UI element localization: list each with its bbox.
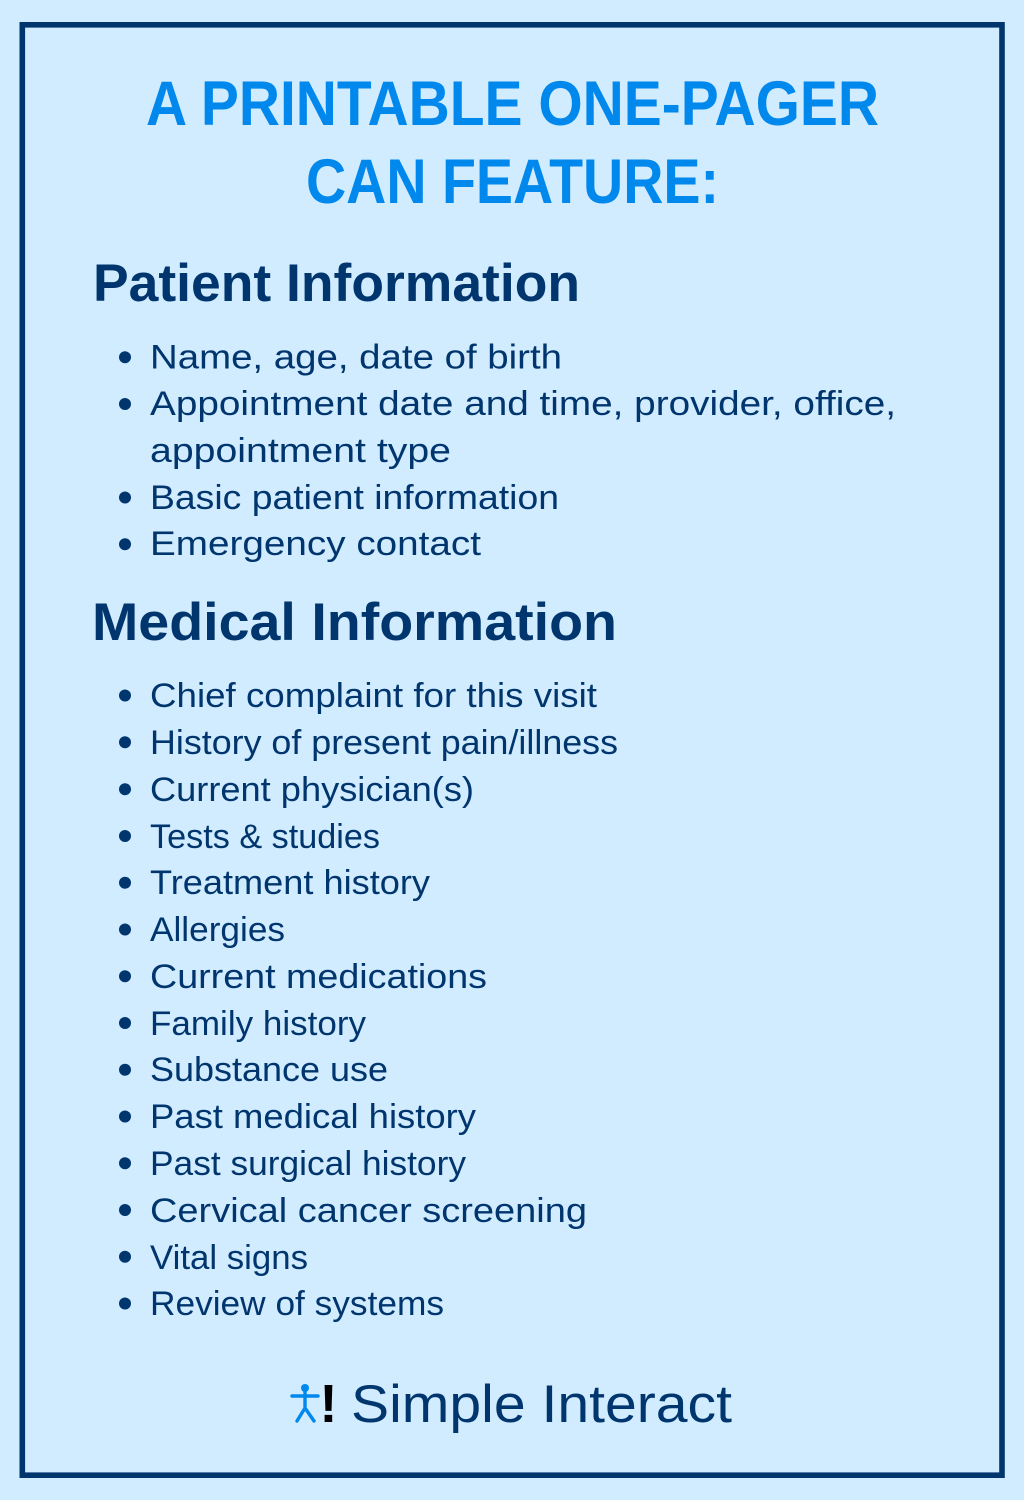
list: patient information items: Emergency contact xyxy=(150,525,481,563)
icon: stick figure xyxy=(292,1384,318,1421)
list: patient information items: Basic patient information xyxy=(150,479,559,517)
list: medical information items: Tests & studies xyxy=(150,818,380,856)
title: CAN FEATURE: xyxy=(306,147,719,217)
list: patient information items: Name, age, date of birth xyxy=(150,339,562,377)
list: medical information items: Family history xyxy=(150,1005,367,1043)
list: medical information items: Substance use xyxy=(150,1051,388,1089)
title: A PRINTABLE ONE-PAGER xyxy=(146,69,879,139)
heading: Medical Information: Medical Information xyxy=(92,593,617,652)
list: medical information items: Current medications xyxy=(150,958,487,996)
list: medical information items: Chief complaint for this visit xyxy=(150,677,597,715)
title xyxy=(146,69,879,217)
list: medical information items: Review of systems xyxy=(150,1285,444,1323)
icon: exclamation mark: ! xyxy=(320,1374,337,1434)
list: medical information items: Vital signs xyxy=(150,1239,308,1277)
list: patient information items: Appointment date and time, provider, office, xyxy=(150,385,896,423)
list: medical information items: Past surgical history xyxy=(150,1145,467,1183)
list: medical information items xyxy=(119,677,618,1323)
list: medical information items: Past medical history xyxy=(150,1098,477,1136)
logo wordmark: Simple Interact xyxy=(351,1375,732,1434)
list: medical information items: Current physician(s) xyxy=(150,771,474,809)
list: medical information items: History of present pain/illness xyxy=(150,724,618,762)
list: medical information items: Cervical cancer screening xyxy=(150,1192,587,1230)
logo: Simple Interact xyxy=(292,1374,732,1434)
list: medical information items: Treatment history xyxy=(150,864,431,902)
list: patient information items xyxy=(119,339,896,563)
list: medical information items: Allergies xyxy=(150,911,285,949)
heading: Patient Information: Patient Information xyxy=(93,254,580,313)
list: patient information items: appointment type xyxy=(150,432,451,470)
